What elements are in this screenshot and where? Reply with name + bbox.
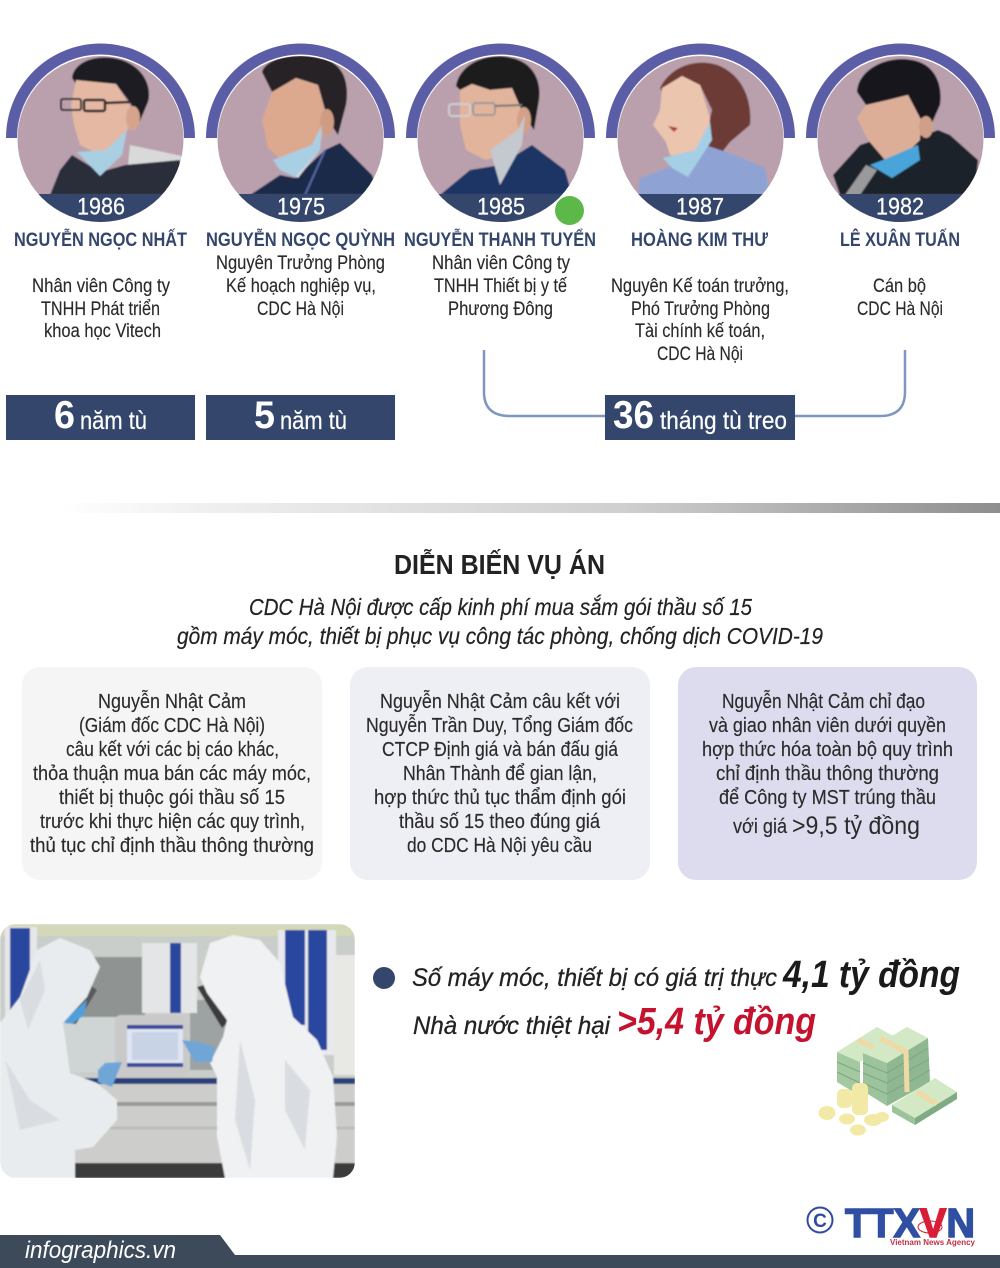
sentence: 36 tháng tù treo: tháng tù treo [660, 407, 787, 435]
sentence: 5 năm tù: 5 [254, 394, 275, 437]
panel: card 2: Nguyễn Trần Duy, Tổng Giám đốc [366, 714, 633, 737]
panel: card 1: trước khi thực hiện các quy trình, [40, 811, 305, 833]
portrait: Nguyễn Ngọc Quỳnh [206, 43, 395, 226]
panel: card 1: Nguyễn Nhật Cảm [98, 690, 246, 713]
fact: real value: Số máy móc, thiết bị có giá trị thực [412, 964, 777, 992]
panel: card 3: và giao nhân viên dưới quyền [709, 715, 946, 737]
subtitle [177, 594, 823, 649]
panel: card 1: thủ tục chỉ định thầu thông thường [30, 835, 314, 857]
fact: real value [412, 954, 960, 996]
person block: Nguyễn Ngọc Quỳnh: Nguyên Trưởng Phòng [216, 253, 385, 274]
person block: Nguyễn Ngọc Quỳnh: Kế hoạch nghiệp vụ, [226, 276, 376, 297]
person block: Nguyễn Thanh Tuyển: Nhân viên Công ty [432, 253, 570, 274]
portrait: Hoàng Kim Thư: 1987 [676, 194, 724, 220]
person block: Nguyễn Ngọc Nhất: NGUYỄN NGỌC NHẤT [14, 229, 187, 251]
panel: card 3 [678, 667, 977, 880]
person block: Nguyễn Ngọc Nhất: Nhân viên Công ty [32, 276, 170, 297]
sentence: 5 năm tù [206, 394, 395, 440]
person block: Nguyễn Ngọc Nhất: khoa học Vitech [44, 321, 161, 342]
person block: Hoàng Kim Thư: Phó Trưởng Phòng [631, 299, 770, 320]
sentence: 5 năm tù: năm tù [280, 407, 347, 435]
panel: card 2: Nguyễn Nhật Cảm câu kết với [380, 690, 620, 713]
photo: technicians in protective suits [0, 924, 355, 1178]
panel: card 1: câu kết với các bị cáo khác, [66, 739, 279, 761]
sentence: 36 tháng tù treo: 36 [613, 394, 654, 437]
panel: card 1: thỏa thuận mua bán các máy móc, [33, 763, 311, 785]
subtitle: gồm máy móc, thiết bị phục vụ công tác phòng, chống dịch COVID-19 [177, 623, 823, 649]
subtitle: CDC Hà Nội được cấp kinh phí mua sắm gói thầu số 15 [249, 594, 752, 620]
panel: card 2: thầu số 15 theo đúng giá [399, 811, 601, 833]
logo: TTXVN: C [813, 1211, 827, 1232]
fact: real value: 4,1 tỷ đồng [782, 954, 960, 996]
person block: Nguyễn Ngọc Nhất [14, 229, 187, 342]
panel: card 2: Nhân Thành để gian lận, [403, 763, 597, 785]
panel: card 1 [22, 667, 322, 880]
person block: Nguyễn Thanh Tuyển: TNHH Thiết bị y tế [434, 276, 567, 297]
fact: state damage: >5,4 tỷ đồng [617, 1001, 816, 1043]
person block: Lê Xuân Tuấn: CDC Hà Nội [857, 299, 943, 320]
person block: Nguyễn Thanh Tuyển: Phương Đông [448, 299, 553, 320]
person block: Hoàng Kim Thư: Tài chính kế toán, [635, 321, 765, 342]
panel: card 3: chỉ định thầu thông thường [716, 763, 939, 785]
person block: Hoàng Kim Thư: Nguyên Kế toán trưởng, [611, 276, 789, 297]
person block: Lê Xuân Tuấn [840, 229, 960, 320]
sentence: 6 năm tù [6, 394, 195, 440]
fact: state damage: Nhà nước thiệt hại [413, 1012, 611, 1040]
portrait: Nguyễn Thanh Tuyển [406, 43, 595, 226]
panel: card 3: >9,5 tỷ đồng [792, 812, 920, 840]
person block: Hoàng Kim Thư: CDC Hà Nội [657, 344, 743, 365]
person block: Nguyễn Ngọc Quỳnh [206, 229, 395, 320]
panel: card 3: Nguyễn Nhật Cảm chỉ đạo [722, 690, 925, 713]
sentence: 6 năm tù: năm tù [80, 407, 147, 435]
person block: Nguyễn Thanh Tuyển [404, 229, 596, 320]
person block: Hoàng Kim Thư: HOÀNG KIM THƯ [631, 229, 768, 251]
heading: DIỄN BIẾN VỤ ÁN [394, 549, 605, 580]
panel: card 1: (Giám đốc CDC Hà Nội) [79, 715, 265, 737]
connector bracket [484, 350, 905, 416]
person block: Nguyễn Ngọc Nhất: TNHH Phát triển [41, 299, 160, 320]
logo: TTXVN: TTXVN [845, 1200, 975, 1246]
panel: card 2: do CDC Hà Nội yêu cầu [407, 835, 592, 857]
portrait: Lê Xuân Tuấn [806, 43, 995, 226]
person block: Lê Xuân Tuấn: Cán bộ [873, 276, 926, 297]
fact: state damage [413, 1001, 816, 1043]
portrait: Lê Xuân Tuấn: 1982 [876, 194, 924, 220]
person block: Nguyễn Ngọc Quỳnh: NGUYỄN NGỌC QUỲNH [206, 229, 395, 251]
panel: card 3: hợp thức hóa toàn bộ quy trình [702, 739, 953, 761]
panel: card 2 [350, 667, 650, 880]
logo: TTXVN: Vietnam News Agency [890, 1237, 975, 1247]
footer band [0, 1235, 1000, 1268]
panel: card 3: với giá [733, 816, 788, 838]
portrait: Nguyễn Ngọc Nhất: 1986 [77, 194, 125, 220]
bullet [373, 967, 395, 989]
panel: card 2: CTCP Định giá và bán đấu giá [382, 739, 619, 761]
portrait: Hoàng Kim Thư [606, 43, 795, 226]
person block: Hoàng Kim Thư [611, 229, 789, 365]
portrait: Nguyễn Thanh Tuyển: 1985 [477, 194, 525, 220]
panel: card 2: hợp thức thủ tục thẩm định gói [374, 787, 626, 809]
person block: Nguyễn Ngọc Quỳnh: CDC Hà Nội [257, 299, 344, 320]
sentence: 6 năm tù: 6 [54, 394, 75, 437]
person block: Nguyễn Thanh Tuyển: NGUYỄN THANH TUYỂN [404, 229, 596, 251]
portrait: Nguyễn Ngọc Nhất [6, 43, 195, 226]
footer: infographics.vn: infographics.vn [25, 1237, 176, 1264]
marker: green dot [555, 196, 584, 225]
panel: card 3: để Công ty MST trúng thầu [719, 787, 936, 809]
sentence: 36 tháng tù treo [605, 394, 795, 440]
person block: Lê Xuân Tuấn: LÊ XUÂN TUẤN [840, 229, 960, 251]
panel: card 1: thiết bị thuộc gói thầu số 15 [59, 787, 285, 809]
portrait: Nguyễn Ngọc Quỳnh: 1975 [277, 194, 325, 220]
icon: money and coins [818, 1027, 957, 1136]
